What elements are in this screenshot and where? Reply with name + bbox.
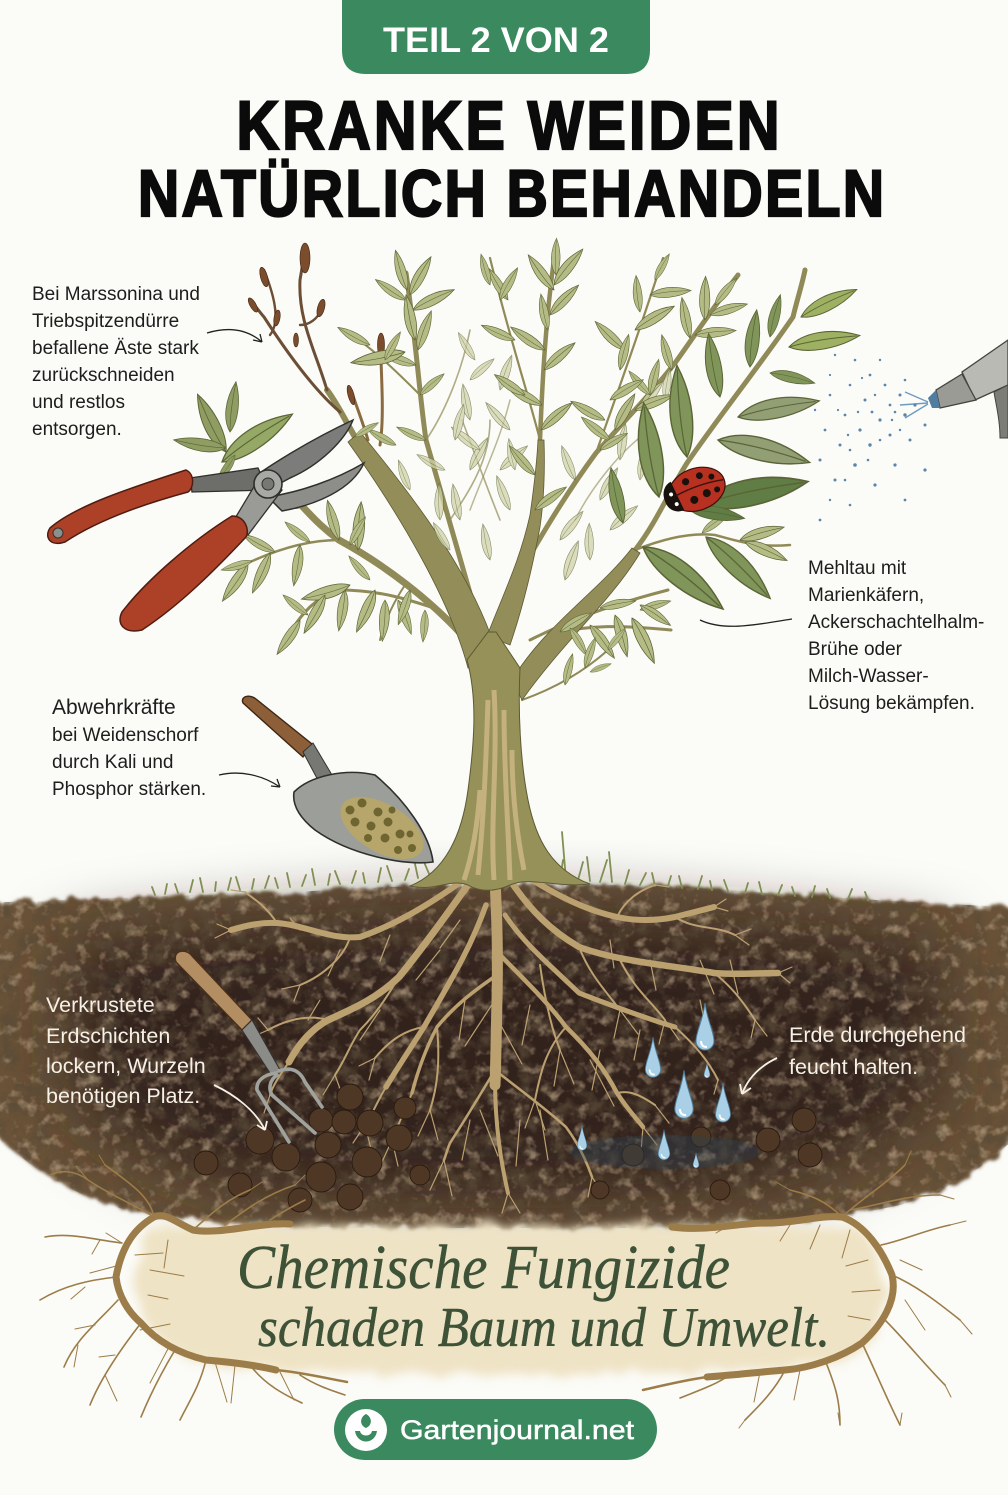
callout: defences: bei Weidenschorf xyxy=(52,725,199,746)
footer logo pill xyxy=(334,1399,657,1460)
callout: loosen soil: benötigen Platz. xyxy=(46,1084,200,1108)
roots xyxy=(215,875,792,1213)
callout: defences: Phosphor stärken. xyxy=(52,779,206,800)
header pill: TEIL 2 VON 2 xyxy=(383,21,609,60)
callout: pruning xyxy=(32,284,262,440)
footer logo pill: Gartenjournal.net xyxy=(400,1415,635,1445)
root frame xyxy=(40,1151,972,1428)
icon: hand fork xyxy=(175,951,322,1142)
soil xyxy=(0,885,1008,1228)
callout: mildew: Brühe oder xyxy=(808,639,903,660)
trunk xyxy=(410,632,590,890)
banner background xyxy=(134,1226,886,1375)
callout: loosen soil: lockern, Wurzeln xyxy=(46,1054,206,1078)
soil clods xyxy=(194,1084,822,1212)
callout: loosen soil: Erdschichten xyxy=(46,1024,170,1048)
callout: mildew: Lösung bekämpfen. xyxy=(808,693,975,714)
callout: mildew: Ackerschachtelhalm- xyxy=(808,612,984,633)
callout: pruning: Triebspitzendürre xyxy=(32,311,179,332)
callout: defences xyxy=(52,696,280,800)
header pill xyxy=(342,0,650,74)
callout: pruning: zurückschneiden xyxy=(32,365,175,386)
willow leaves xyxy=(218,238,789,686)
title: NATÜRLICH BEHANDELN xyxy=(138,157,884,231)
icon: pruning shears xyxy=(48,420,364,631)
branches xyxy=(248,245,805,700)
water drops xyxy=(570,1003,760,1169)
callout: mildew: Marienkäfern, xyxy=(808,585,924,606)
trunk shading xyxy=(464,690,524,880)
tree xyxy=(173,238,861,890)
callout: keep moist xyxy=(740,1023,966,1094)
callout: defences: Abwehrkräfte xyxy=(52,696,176,719)
callout: pruning: Bei Marssonina und xyxy=(32,284,200,305)
callout: loosen soil xyxy=(46,993,267,1130)
callout: pruning: und restlos xyxy=(32,392,125,413)
closing message xyxy=(237,1234,830,1359)
buds xyxy=(246,243,384,405)
callout: pruning: befallene Äste stark xyxy=(32,338,199,359)
callout: keep moist: feucht halten. xyxy=(789,1055,918,1079)
spray droplets xyxy=(814,354,928,521)
title xyxy=(138,87,884,231)
callout: keep moist: Erde durchgehend xyxy=(789,1023,966,1047)
callout: loosen soil: Verkrustete xyxy=(46,993,155,1017)
callout: pruning: entsorgen. xyxy=(32,419,122,440)
large leaves xyxy=(173,283,861,618)
callout: mildew xyxy=(700,558,984,714)
callout: defences: durch Kali und xyxy=(52,752,173,773)
callout: mildew: Mehltau mit xyxy=(808,558,907,579)
icon: spray nozzle xyxy=(928,340,1008,438)
grass xyxy=(152,832,868,900)
icon: hand trowel with fertilizer xyxy=(242,696,434,872)
title: KRANKE WEIDEN xyxy=(236,87,780,164)
icon: ladybug xyxy=(658,460,731,521)
callout: mildew: Milch-Wasser- xyxy=(808,666,929,687)
main limbs xyxy=(348,432,640,700)
closing message: Chemische Fungizide xyxy=(237,1234,730,1302)
icon: logo xyxy=(345,1409,387,1451)
pale background leaves xyxy=(395,331,674,581)
closing message: schaden Baum und Umwelt. xyxy=(258,1297,830,1359)
